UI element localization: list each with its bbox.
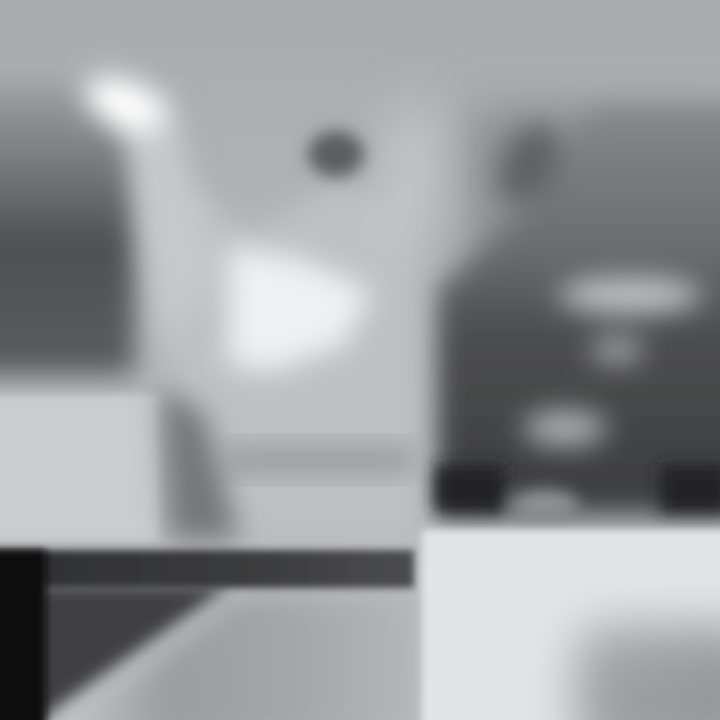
lower torso shading <box>225 445 415 475</box>
central light figure body <box>165 185 418 530</box>
black left corner post <box>0 550 46 720</box>
right panel light blobs <box>523 277 702 446</box>
right mid grey backdrop <box>470 110 720 290</box>
raised right arm <box>380 105 435 240</box>
bright highlight on hand <box>76 64 172 144</box>
left dark panel <box>0 85 135 375</box>
dark shape at upper right <box>487 115 573 215</box>
dark shadow beside block <box>160 385 240 540</box>
raised left arm <box>120 95 215 350</box>
grey rounded object bottom right <box>575 625 720 720</box>
left light block <box>0 395 160 540</box>
right dark panel <box>436 110 720 515</box>
bottom left dark wedge <box>30 585 230 720</box>
head <box>308 131 364 177</box>
dark horizontal shelf <box>0 550 414 588</box>
dark band lower right panel <box>435 465 720 521</box>
bright torso highlight <box>228 245 372 372</box>
bottom right white surface <box>422 530 720 720</box>
bottom floor mid grey <box>50 595 420 720</box>
